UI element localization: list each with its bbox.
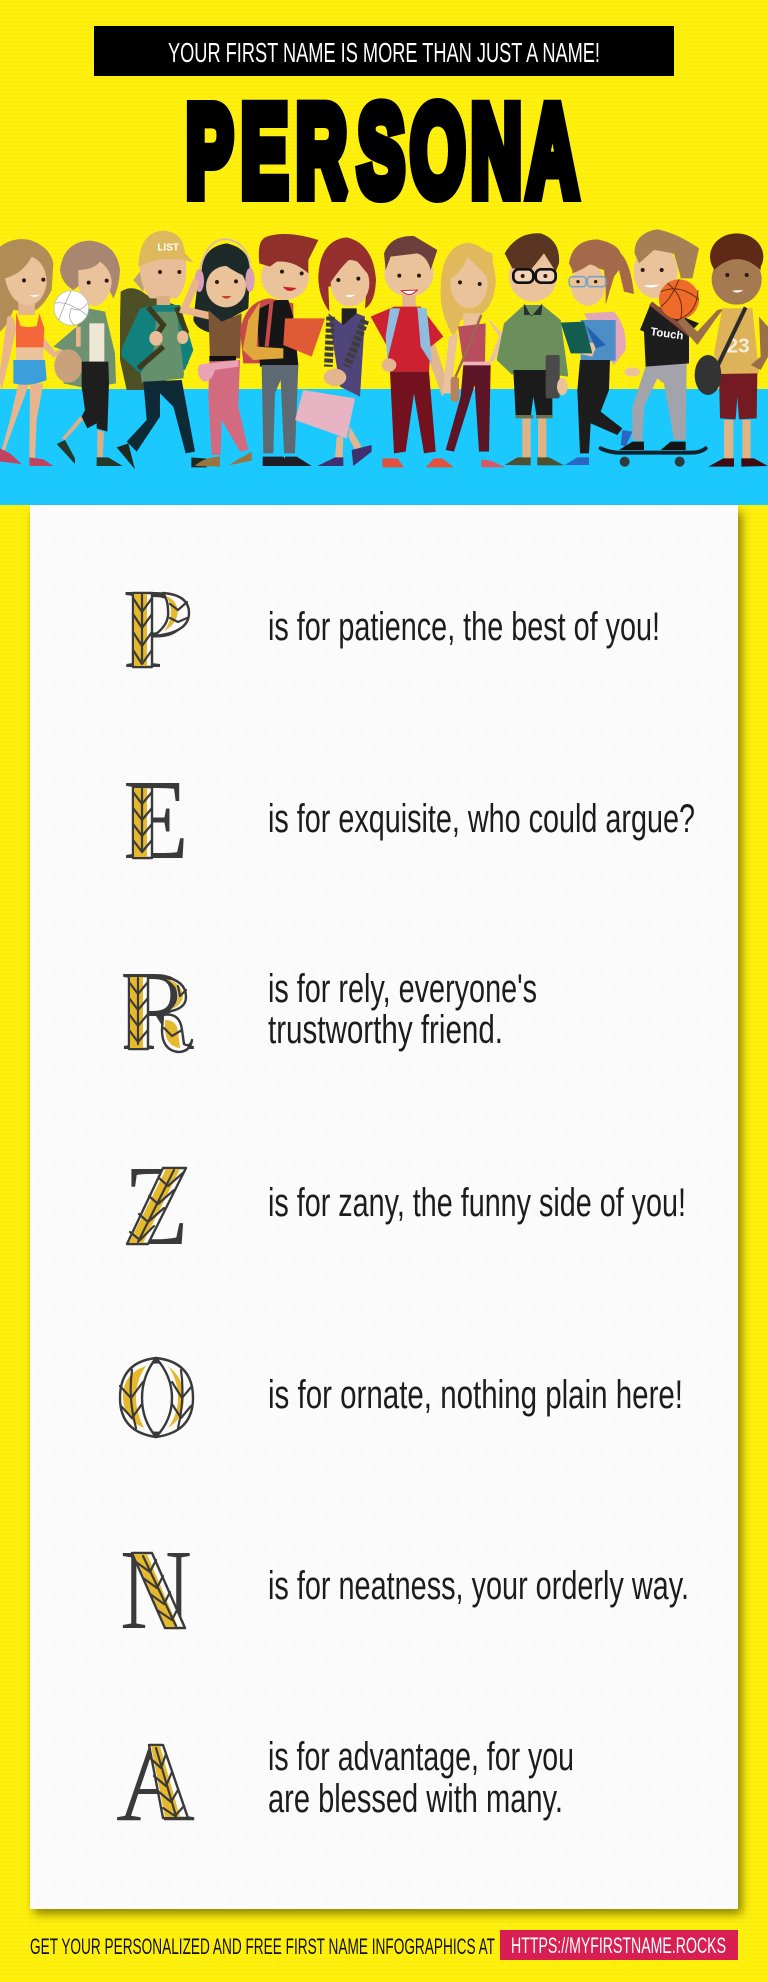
icon: letter Z wheat fill <box>127 1168 186 1244</box>
person: skater boy with basketball: Touch <box>650 326 684 343</box>
row A <box>116 1718 574 1845</box>
person: boy with glasses <box>497 233 568 465</box>
person: boy with backpack: LIST <box>157 243 179 254</box>
description R: trustworthy friend. <box>268 1008 503 1052</box>
wheat veins on O <box>120 1370 192 1428</box>
icon: letter N wheat fill <box>132 1553 185 1628</box>
row N <box>120 1526 689 1653</box>
person: girl with volleyball <box>53 241 123 466</box>
illustration: group of people, left half <box>0 231 376 469</box>
person: blonde girl <box>441 243 506 467</box>
description R <box>268 967 537 1052</box>
person: boy in yellow jersey <box>659 233 768 467</box>
row P <box>122 565 660 692</box>
row O <box>119 1333 683 1460</box>
person: girl with pink bag <box>295 237 376 466</box>
panel: card drop shadow <box>34 512 742 1914</box>
person: girl in orange top <box>0 239 80 466</box>
icon: letter P wheat fill <box>133 593 189 667</box>
wheat veins on A <box>150 1748 184 1816</box>
person: girl with ponytail and tablet <box>561 239 634 465</box>
person: skater boy with basketball <box>601 229 706 467</box>
wheat veins on E <box>133 788 152 852</box>
illustration: group of people, right half <box>371 229 768 467</box>
person: boy with book <box>240 234 325 466</box>
wheat veins on R <box>129 978 186 1044</box>
person: boy in red shirt <box>371 236 454 467</box>
icon: letter E wheat fill <box>133 787 152 858</box>
wheat veins on P <box>133 594 187 664</box>
letter O: O <box>119 1333 195 1460</box>
letter N: N <box>120 1526 192 1653</box>
tagline banner <box>94 26 674 76</box>
floor band <box>0 389 768 505</box>
footer <box>30 1930 738 1960</box>
row E <box>123 756 695 883</box>
footer call to action: GET YOUR PERSONALIZED AND FREE FIRST NAME INFOGRAPHICS AT <box>30 1934 495 1959</box>
letter P: P <box>122 565 190 692</box>
wheat veins on Z <box>130 1170 184 1242</box>
description R: is for rely, everyone's <box>268 967 537 1011</box>
person: boy in yellow jersey: 23 <box>727 335 750 358</box>
title: PERSONA <box>186 79 578 222</box>
letter E: E <box>123 756 189 883</box>
icon: letter R wheat fill <box>129 976 192 1052</box>
person: girl with headphones <box>184 239 255 467</box>
description A: is for advantage, for you <box>268 1735 574 1779</box>
icon: letter A wheat fill <box>149 1745 188 1818</box>
row Z <box>123 1142 686 1269</box>
description A <box>268 1735 574 1821</box>
letter A: A <box>116 1718 195 1845</box>
icon: letter O wheat fill <box>120 1358 193 1437</box>
letter R: R <box>120 947 194 1074</box>
panel: white card <box>30 505 738 1909</box>
row R <box>120 947 537 1074</box>
icon: basketball <box>659 279 699 320</box>
wheat veins on N <box>136 1556 178 1626</box>
description A: are blessed with many. <box>268 1777 563 1821</box>
letter Z: Z <box>123 1142 189 1269</box>
person: boy with backpack <box>117 231 207 469</box>
